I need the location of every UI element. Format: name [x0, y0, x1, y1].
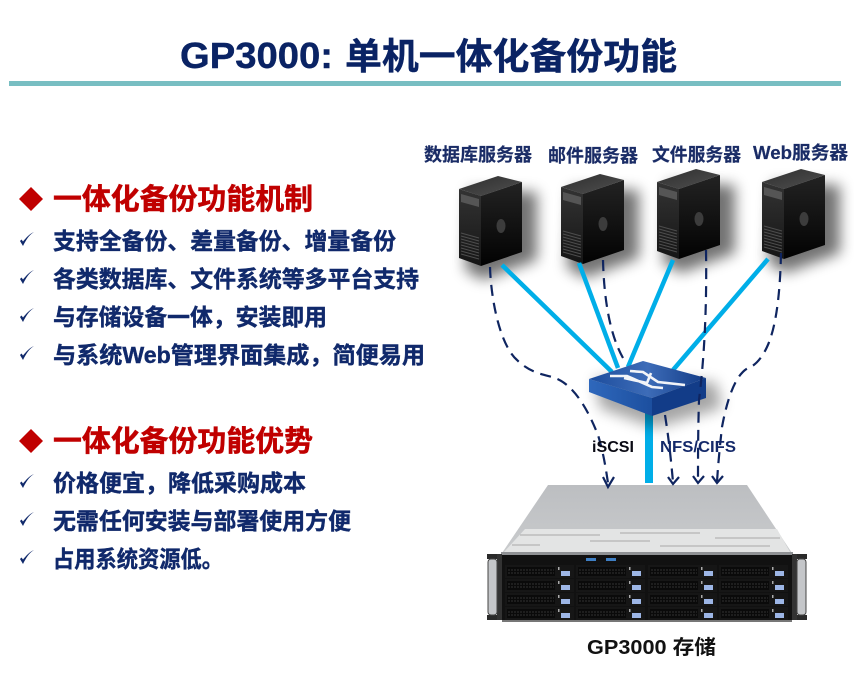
- storage unit: [487, 485, 807, 622]
- dashed protocol links: [490, 250, 781, 483]
- switch: [589, 361, 722, 428]
- icon: diamond bullet: [19, 187, 43, 211]
- checklist: mechanism: 与存储设备一体，安装即用: [53, 304, 327, 330]
- storage caption: GP3000 存储: [587, 636, 716, 659]
- servers: [459, 169, 840, 280]
- heading: advantages: 一体化备份功能优势: [53, 425, 313, 458]
- title: [180, 35, 677, 77]
- server labels: 数据库服务器: [424, 145, 532, 165]
- server labels: [424, 143, 848, 166]
- server labels: 文件服务器: [652, 144, 741, 165]
- title: GP3000:: [180, 35, 333, 76]
- title rule: [9, 81, 841, 86]
- checklist: advantages: 占用系统资源低。: [53, 546, 223, 572]
- protocol labels: [592, 439, 736, 456]
- server labels: Web服务器: [753, 143, 848, 163]
- checklist: advantages: [20, 470, 351, 572]
- protocol labels: NFS/CIFS: [660, 439, 736, 456]
- checklist: mechanism: [20, 228, 425, 368]
- checklist: advantages: 无需任何安装与部署使用方便: [53, 508, 351, 534]
- heading: mechanism: 一体化备份功能机制: [53, 183, 313, 216]
- panel: mechanism: [19, 183, 425, 368]
- checklist: advantages: 价格便宜，降低采购成本: [53, 470, 306, 496]
- rack ear: left: [487, 554, 502, 620]
- checklist: mechanism: 支持全备份、差量备份、增量备份: [53, 228, 396, 254]
- server labels: 邮件服务器: [548, 146, 638, 166]
- protocol labels: iSCSI: [592, 439, 634, 456]
- title: 单机一体化备份功能: [345, 36, 677, 77]
- panel: advantages: [19, 425, 351, 572]
- arrowheads: [603, 476, 723, 487]
- drive bays: [505, 558, 788, 620]
- checklist: mechanism: 与系统Web管理界面集成，简便易用: [53, 342, 425, 368]
- checklist: mechanism: 各类数据库、文件系统等多平台支持: [53, 266, 419, 292]
- blue network links: [502, 259, 768, 483]
- icon: diamond bullet: [19, 429, 43, 453]
- rack ear: right: [792, 554, 807, 620]
